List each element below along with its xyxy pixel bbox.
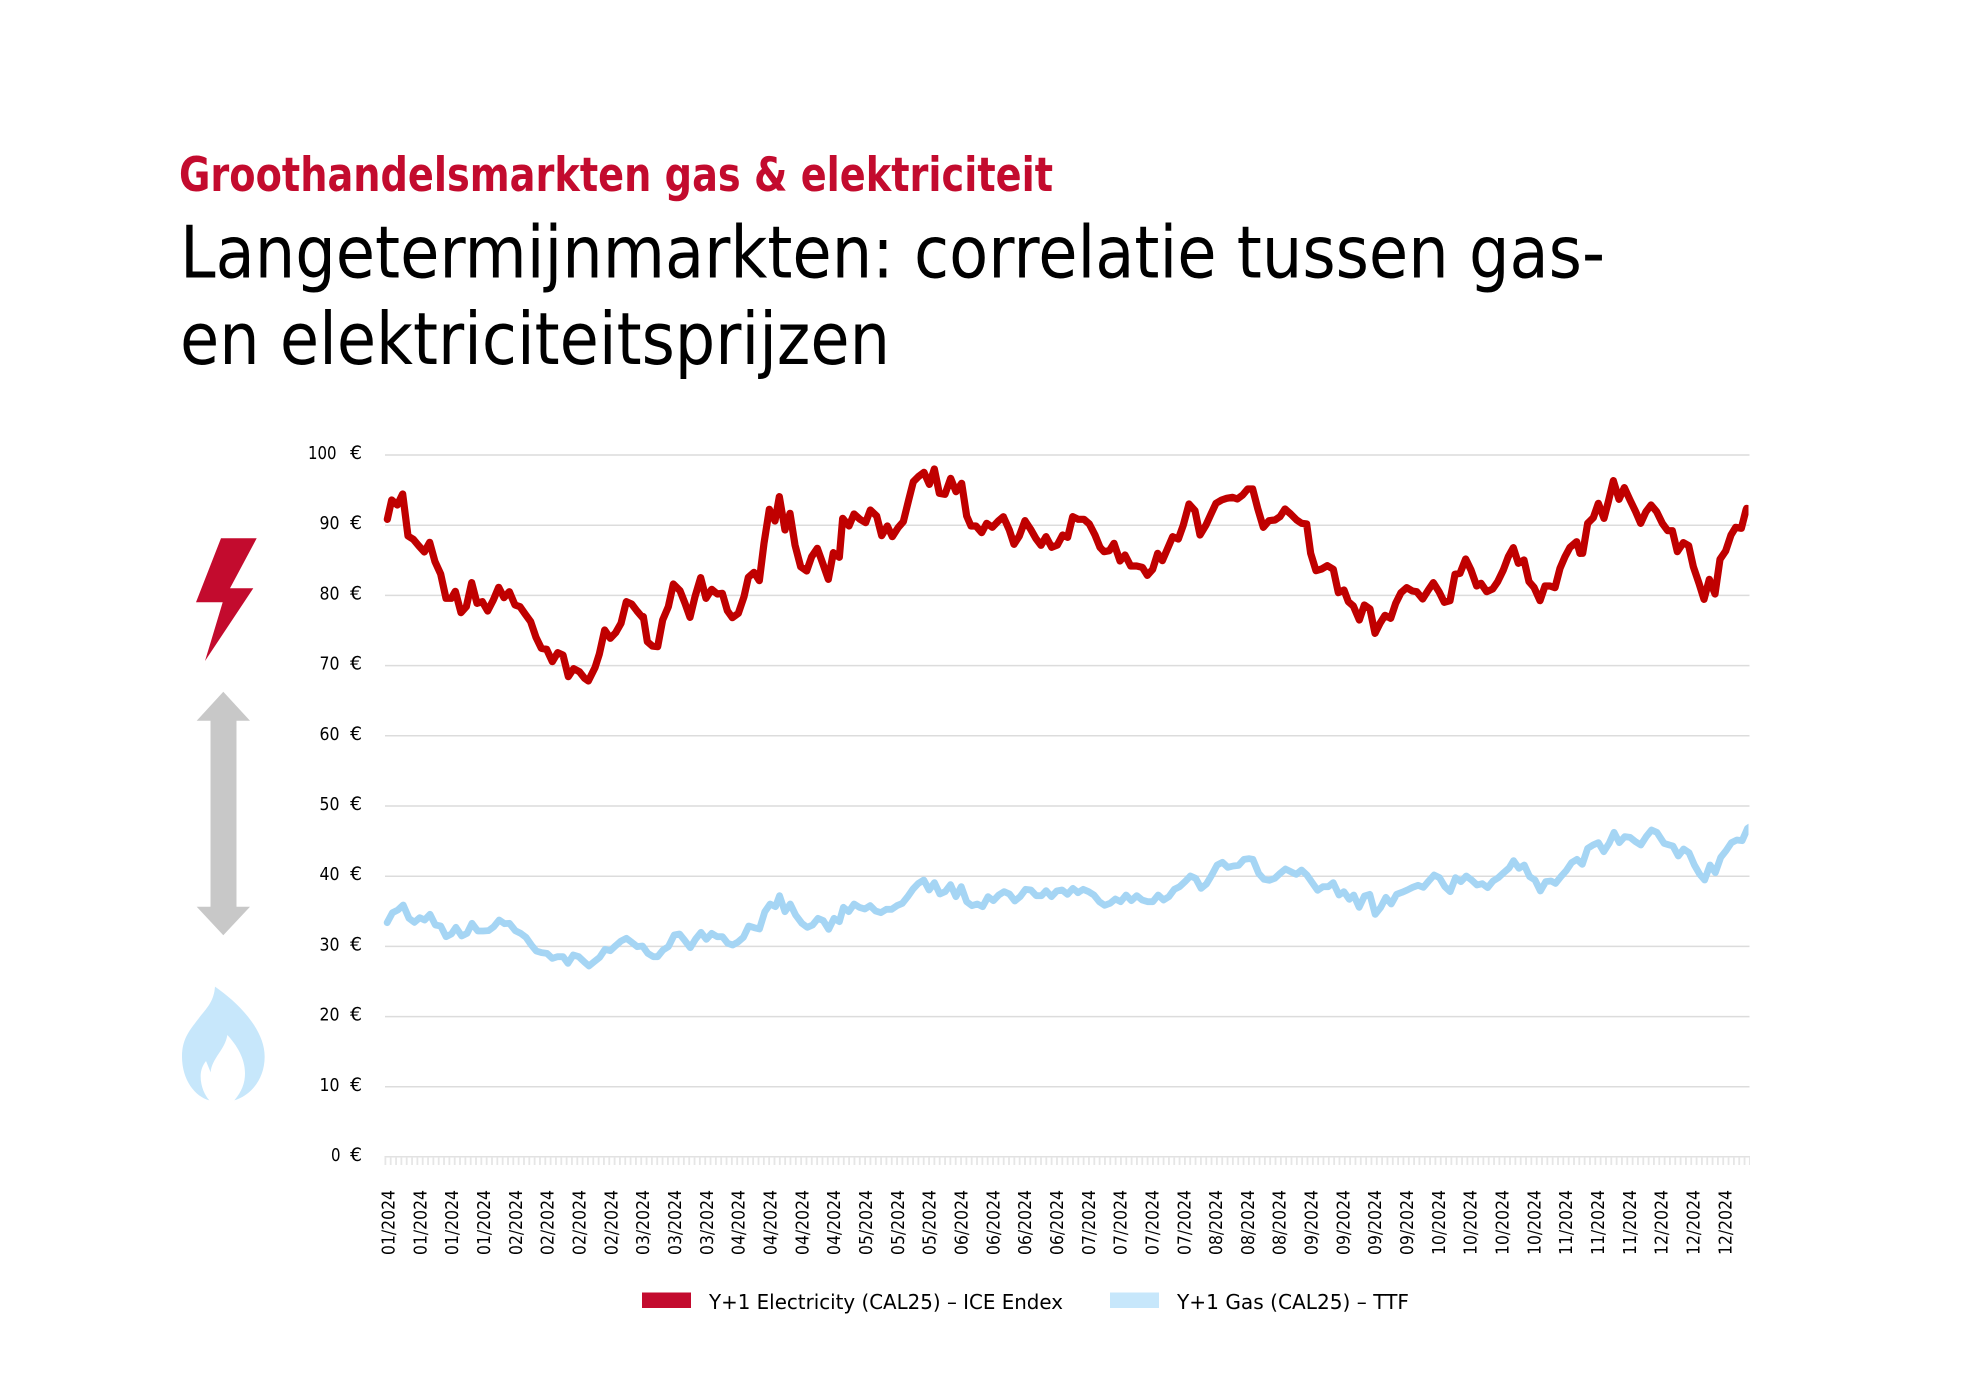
x axis date labels: 02/2024 [570,1190,590,1255]
y axis labels: 60 [320,724,340,745]
x axis date labels: 01/2024 [378,1190,400,1255]
legend: electricity: Y+1 Electricity (CAL25) – ICE Endex [708,1290,1063,1314]
x axis date labels: 03/2024 [665,1190,686,1255]
x axis date labels: 10/2024 [1461,1190,1482,1255]
x axis date labels: 07/2024 [1142,1190,1163,1255]
x axis date labels: 10/2024 [1429,1190,1450,1255]
x axis date labels: 06/2024 [1047,1190,1068,1255]
line: Y+1 electricity [387,469,1747,681]
x axis date labels: 01/2024 [474,1190,495,1255]
x axis date labels: 05/2024 [856,1190,877,1255]
x axis date labels: 03/2024 [697,1190,718,1255]
x axis date labels: 10/2024 [1493,1190,1514,1255]
icon: lightning bolt [196,538,257,661]
x axis date labels: 02/2024 [506,1190,527,1255]
title: en elektriciteitsprijzen [180,297,890,381]
x axis date labels: 04/2024 [760,1190,782,1255]
x axis date labels: 12/2024 [1652,1190,1673,1255]
line: Y+1 gas [387,827,1750,966]
x axis date labels: 06/2024 [1015,1190,1036,1255]
title [180,210,1605,381]
y axis labels: 50 [320,794,340,815]
x axis date labels: 07/2024 [1111,1190,1132,1255]
subtitle: Groothandelsmarkten gas & elektriciteit [179,148,1053,203]
legend: gas: Y+1 Gas (CAL25) – TTF [1176,1290,1409,1314]
x axis date labels: 09/2024 [1365,1190,1386,1255]
x axis date labels [378,1190,1736,1255]
y axis labels: € [350,933,362,955]
y axis labels [308,442,362,1166]
x axis date labels: 12/2024 [1684,1190,1704,1255]
y axis labels: € [350,793,362,815]
x axis date labels: 01/2024 [442,1190,463,1255]
x axis date labels: 02/2024 [601,1190,622,1255]
x axis date labels: 02/2024 [538,1190,559,1255]
icon: gas flame [182,987,265,1100]
y axis labels: 30 [320,934,340,955]
x axis date labels: 03/2024 [633,1190,654,1255]
x axis date labels: 11/2024 [1556,1190,1577,1255]
x axis date labels: 09/2024 [1397,1190,1418,1255]
icon: double-headed arrow [197,692,250,935]
y axis labels: € [350,1074,362,1096]
x axis date labels: 10/2024 [1524,1190,1545,1255]
x axis date labels: 06/2024 [983,1190,1004,1255]
y axis labels: € [350,582,362,604]
x axis date labels: 09/2024 [1333,1190,1354,1255]
y axis labels: 0 [331,1145,340,1166]
x axis date labels: 08/2024 [1270,1190,1291,1255]
line chart [308,442,1750,1255]
x axis date labels: 05/2024 [920,1190,941,1255]
y axis labels: 90 [320,513,340,534]
x axis date labels: 05/2024 [888,1190,909,1255]
y axis labels: 70 [320,654,340,675]
x axis date labels: 11/2024 [1620,1190,1641,1255]
x axis date labels: 09/2024 [1302,1190,1323,1255]
y axis labels: € [350,442,362,464]
x axis date labels: 04/2024 [824,1190,845,1255]
y axis labels: € [350,653,362,675]
y axis labels: € [350,512,362,534]
y axis labels: € [350,1144,362,1166]
x axis date labels: 06/2024 [951,1190,972,1255]
title: Langetermijnmarkten: correlatie tussen gas- [180,210,1605,294]
x axis date labels: 07/2024 [1079,1190,1100,1255]
x axis date labels: 12/2024 [1715,1190,1736,1255]
x axis date labels: 07/2024 [1174,1190,1195,1255]
y axis labels: 20 [320,1005,340,1026]
x axis date labels: 08/2024 [1206,1190,1227,1255]
x axis date labels: 11/2024 [1588,1190,1609,1255]
y axis labels: 100 [308,443,336,464]
y axis labels: € [350,1004,362,1026]
x axis date labels: 04/2024 [792,1190,813,1255]
legend [642,1290,1409,1314]
x axis date labels: 04/2024 [729,1190,750,1255]
x axis date labels: 08/2024 [1238,1190,1259,1255]
y axis labels: € [350,723,362,745]
y axis labels: € [350,863,362,885]
y axis labels: 40 [320,864,340,885]
x axis date labels: 01/2024 [410,1190,431,1255]
y axis labels: 80 [320,583,340,604]
x axis with ticks [384,1157,1750,1161]
y axis labels: 10 [320,1075,340,1096]
